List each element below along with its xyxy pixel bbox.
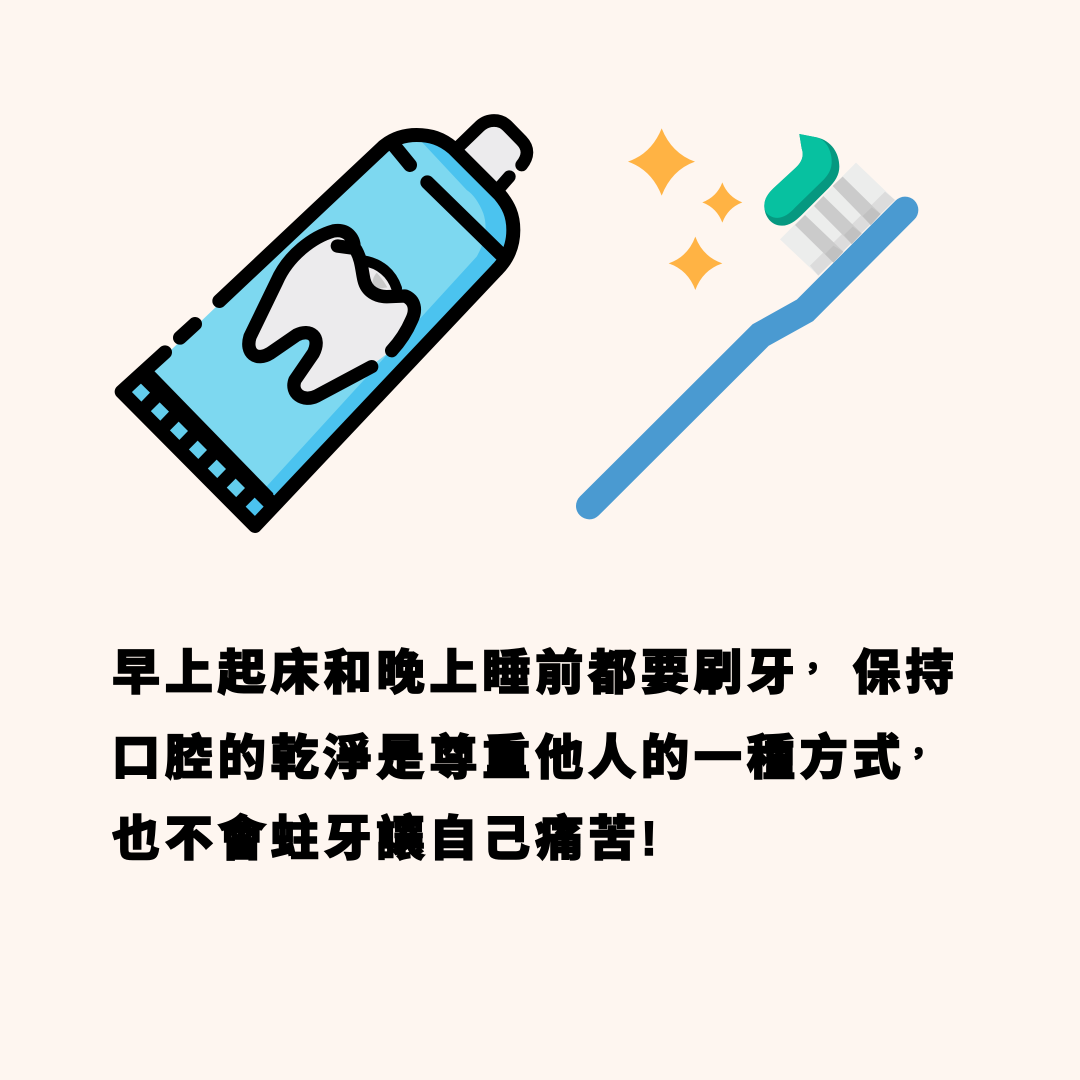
text line 1: 早上起床和晚上睡前都要刷牙 保持 — [112, 647, 958, 700]
tube cap — [458, 120, 527, 188]
text line 2: 口腔的乾淨是尊重他人的一種方式 — [112, 732, 906, 785]
text line 3: 也不會蛀牙讓自己痛苦! — [112, 813, 662, 866]
toothbrush handle — [589, 210, 905, 506]
tube crimp squares — [120, 367, 273, 530]
sparkle small — [702, 182, 742, 223]
tube body shadow — [263, 140, 509, 500]
icon: toothbrush with paste and sparkles — [589, 128, 905, 506]
tooth — [249, 231, 414, 400]
text line 2: ， — [904, 738, 934, 771]
sparkle medium — [669, 237, 722, 290]
sparkle large — [628, 128, 695, 196]
tube outline — [122, 135, 513, 526]
icon: toothpaste tube — [120, 120, 527, 530]
text line 1: ， — [798, 653, 828, 686]
bristles — [780, 163, 895, 276]
toothpaste dab — [764, 134, 839, 226]
tube body — [147, 134, 512, 500]
